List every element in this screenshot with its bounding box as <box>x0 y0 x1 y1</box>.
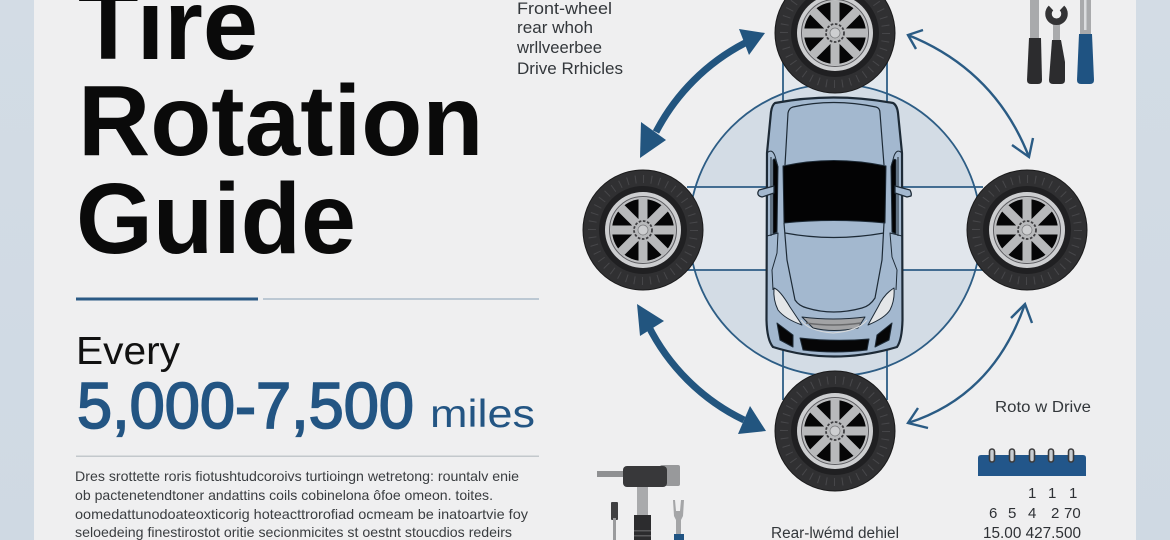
interval callout <box>76 330 535 442</box>
rotation diagram backdrop <box>687 50 983 400</box>
hood <box>784 223 884 312</box>
fender lines <box>767 233 778 290</box>
description text block: ob pactenetendtoner andattins coils cobinelona ôfoe omeon. toites. <box>75 487 493 503</box>
body <box>766 98 902 356</box>
description text block <box>75 468 528 540</box>
wrench <box>1027 0 1042 84</box>
icon: bottom left tools <box>597 465 684 540</box>
mileage schedule numbers: 1 <box>1069 485 1077 502</box>
front-wheel drive label: Front-wheel <box>517 0 612 18</box>
rear drive label: Roto w Drive <box>995 399 1091 416</box>
interval callout: 5,000-7,500 <box>77 369 414 442</box>
title: Rotation <box>78 65 483 177</box>
mileage schedule numbers <box>983 485 1081 540</box>
mileage schedule numbers: 5 <box>1008 505 1016 522</box>
wheel: right <box>967 170 1087 290</box>
arrow: top left, thick <box>640 29 765 158</box>
arrow: bottom right, thin <box>908 304 1032 428</box>
title divider <box>76 298 539 300</box>
arrow: top right, thin <box>908 30 1033 157</box>
paragraph divider <box>76 456 539 457</box>
icon: top right tools <box>1027 0 1094 84</box>
interval callout: Every <box>76 330 181 373</box>
description text block: oomedattunodoateoxticorig hoteacttrorofiad ocmeam be inatoartvie foy <box>75 506 528 522</box>
wheel: bottom <box>775 371 895 491</box>
side windows <box>773 159 778 234</box>
description text block: seloedeing finestirostot oritie secionmicites st oestnt stoucdios redeirs <box>75 524 512 540</box>
headlights <box>774 288 802 325</box>
bumper vents <box>800 338 869 352</box>
spanner <box>1048 8 1065 84</box>
car, top view <box>758 98 911 356</box>
mileage schedule numbers: 1 <box>1048 485 1056 502</box>
front-wheel drive label <box>516 0 623 78</box>
icon: calendar <box>978 449 1086 476</box>
mileage schedule numbers: 4 <box>1028 505 1036 522</box>
wheel: top <box>775 0 895 93</box>
arrow: bottom left, thick <box>637 304 766 434</box>
front-wheel drive label: Drive Rrhicles <box>517 60 623 78</box>
front-wheel drive label: rear whoh <box>517 19 593 37</box>
title: Guide <box>76 163 356 275</box>
mirrors <box>758 186 911 197</box>
wheel: left <box>583 170 703 290</box>
description text block: Dres srottette roris fiotushtudcoroivs turtioingn wetretong: rountalv enie <box>75 468 519 484</box>
mileage schedule numbers: 6 <box>989 505 997 522</box>
screwdriver <box>1077 0 1094 84</box>
door lines <box>767 151 902 167</box>
mileage schedule numbers: 70 <box>1064 505 1081 522</box>
windshield <box>783 160 886 223</box>
mileage schedule numbers: 2 <box>1051 505 1059 522</box>
mileage schedule numbers: 1 <box>1028 485 1036 502</box>
title <box>76 0 483 275</box>
interval callout: miles <box>430 393 535 436</box>
hammer <box>597 465 680 540</box>
front-wheel drive label: wrllveerbee <box>516 39 602 57</box>
roof line <box>785 102 884 165</box>
fork tool <box>673 500 684 540</box>
small driver <box>611 502 618 540</box>
grille <box>802 317 865 330</box>
